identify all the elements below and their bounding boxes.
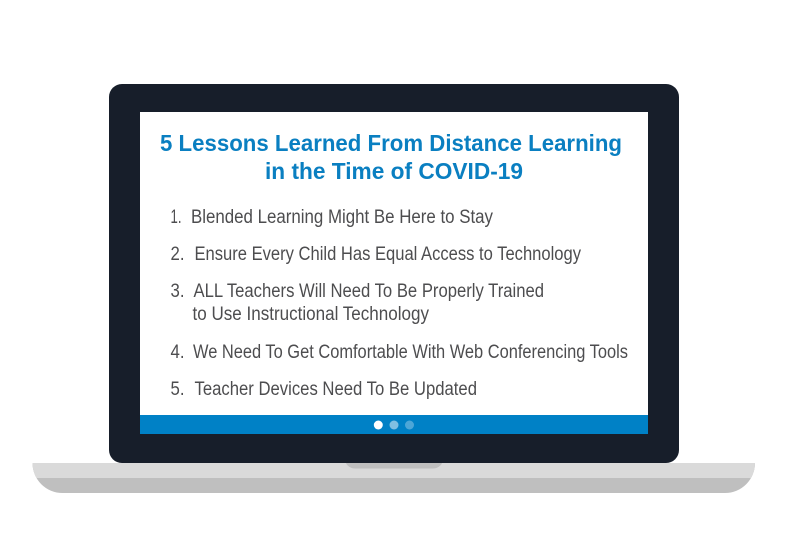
slide title — [160, 130, 622, 184]
lessons list: Blended Learning Might Be Here to Stay — [191, 207, 493, 228]
lessons list: Ensure Every Child Has Equal Access to Technology — [194, 244, 581, 265]
laptop screen bezel — [109, 84, 679, 463]
lessons list: 2. — [170, 244, 184, 265]
slide title: in the Time of COVID-19 — [265, 158, 523, 184]
slide title: 5 Lessons Learned From Distance Learning — [160, 130, 622, 156]
lessons list: 3. — [170, 281, 184, 302]
laptop hinge notch — [346, 463, 442, 468]
lessons list: ALL Teachers Will Need To Be Properly Trained — [194, 281, 544, 302]
lessons list: We Need To Get Comfortable With Web Conferencing Tools — [193, 342, 628, 363]
blue footer bar with pagination dots — [140, 415, 648, 434]
lessons list: 5. — [170, 379, 184, 400]
lessons list: Teacher Devices Need To Be Updated — [194, 379, 477, 400]
laptop base — [32, 463, 755, 493]
lessons list — [170, 207, 628, 400]
lessons list: to Use Instructional Technology — [192, 304, 429, 325]
lessons list: 1. — [170, 207, 182, 228]
slide panel — [140, 112, 648, 434]
lessons list: 4. — [170, 342, 184, 363]
